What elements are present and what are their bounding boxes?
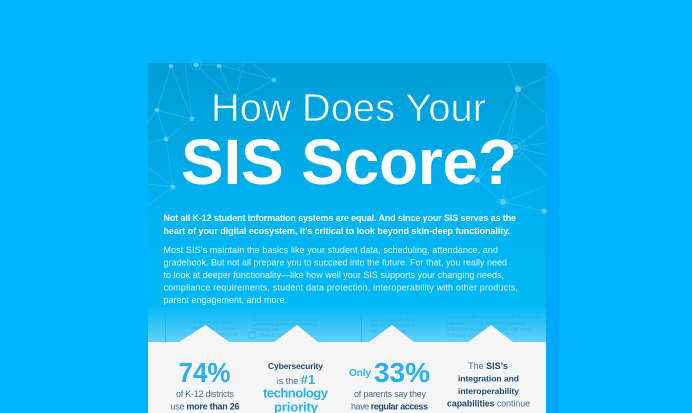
body paragraph: Most SIS’s maintain the basics like your student data, scheduling, attendance, and xyxy=(164,245,498,255)
title: SIS Score? xyxy=(181,126,517,198)
faded background document: Will there be interoperability with other xyxy=(447,327,532,333)
stat: 74%: of K-12 districts xyxy=(176,389,234,399)
faded background document: vendors too xyxy=(253,327,279,333)
stat: 33% xyxy=(349,357,430,412)
stat: 33%: Only xyxy=(349,368,371,379)
title: How Does Your xyxy=(211,87,486,130)
faded background document: systems & what's on xyxy=(193,332,239,338)
faded background document: software and products? xyxy=(447,333,499,339)
stat: cybersecurity: technology xyxy=(263,386,329,400)
title xyxy=(181,87,517,198)
faded background document: data from business xyxy=(193,326,236,332)
stat: cybersecurity: Cybersecurity xyxy=(268,361,323,371)
faded background document: SIS, it probably does xyxy=(370,317,417,323)
stat: integration xyxy=(447,361,530,413)
stat: 74% xyxy=(170,357,240,412)
stat: integration: integration and xyxy=(458,374,519,384)
faded background document xyxy=(165,314,542,342)
intro bold paragraph xyxy=(164,213,516,236)
faded background document: updates and is it regularly updated? xyxy=(447,321,526,327)
hero panel xyxy=(148,63,546,343)
faded background document: and so should it in it xyxy=(370,323,415,329)
body paragraph: compliance requirements, student data protection, interoperability with other products, xyxy=(164,282,518,292)
stat: 33%: of parents say they xyxy=(354,389,426,399)
stat: integration: interoperability xyxy=(458,386,519,396)
body paragraph: parent engagement, and more. xyxy=(164,295,287,305)
network graphic: right xyxy=(474,63,547,214)
stat: 74%: use more than 26 xyxy=(170,402,240,412)
white stats panel with peaks xyxy=(148,325,546,413)
faded background document: across student apps, hosting xyxy=(253,322,317,328)
faded background document: Is there a plan for the schedule of software xyxy=(447,315,542,321)
stat: 33%: have regular access xyxy=(351,402,428,412)
stat: cybersecurity xyxy=(263,361,329,413)
intro bold paragraph: heart of your digital ecosystem, it’s critical to look beyond skin-deep functionality. xyxy=(164,226,510,236)
faded background document: Data and systems are secure xyxy=(253,317,318,323)
body paragraph: to look at deeper functionality—like how well your SIS supports your changing needs, xyxy=(164,270,504,280)
stat: cybersecurity: is the #1 xyxy=(277,372,315,387)
stat: 33%: 33% xyxy=(374,357,430,388)
stat: integration: The SIS’s xyxy=(468,361,508,371)
card side shadow xyxy=(546,63,559,413)
body paragraph xyxy=(164,245,518,305)
body paragraph: gradebook. But not all prepare you to succeed into the future. For that, you really need xyxy=(164,258,507,268)
faded background document: with your friendly xyxy=(370,329,408,335)
stat: integration: capabilities continue xyxy=(447,398,530,408)
intro bold paragraph: Not all K-12 student information systems are equal. And since your SIS serves as the xyxy=(164,213,516,223)
stat: 74%: 74% xyxy=(178,357,231,388)
faded background document: Does it support data xyxy=(259,333,304,339)
network graphic: left xyxy=(148,60,276,205)
faded background document: it should integrate xyxy=(193,320,233,326)
